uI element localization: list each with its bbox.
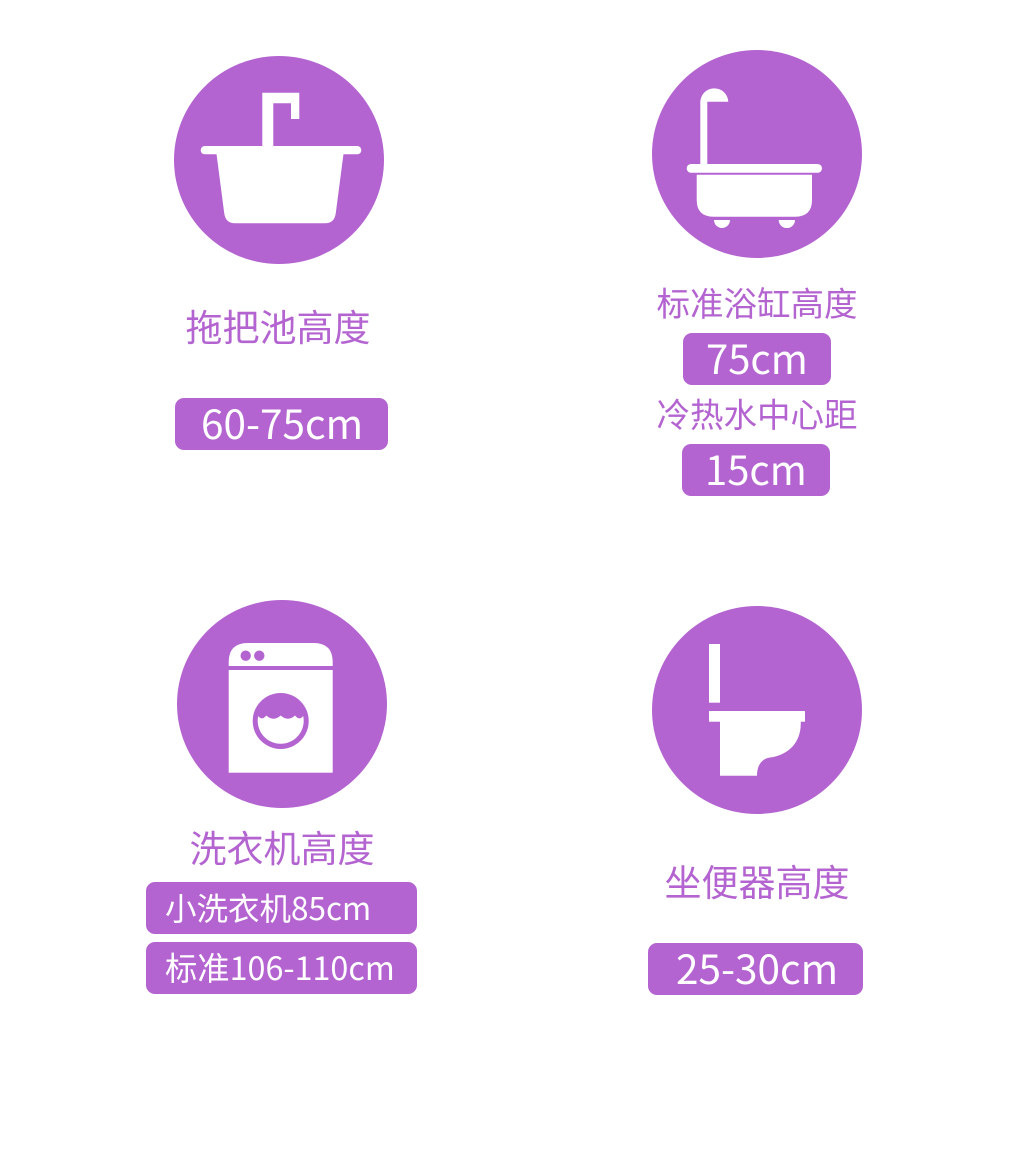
badge: 60-75cm: 60-75cm [201, 392, 363, 451]
badge: small washing machine 85cm [146, 882, 417, 934]
heading: mop sink height: 拖把池高度 [186, 298, 370, 352]
badge: small washing machine 85cm: 小洗衣机85cm [165, 884, 371, 930]
badge: 25-30cm [648, 943, 863, 995]
icon: mop sink [174, 56, 384, 264]
icon: washing machine [177, 600, 387, 808]
heading: toilet seat height: 坐便器高度 [664, 853, 850, 907]
icon: bathtub [652, 50, 862, 258]
badge: 60-75cm [175, 398, 388, 450]
badge: 75cm: 75cm [706, 328, 808, 386]
badge: standard 106-110cm: 标准106-110cm [165, 944, 395, 990]
badge: 15cm: 15cm [705, 439, 807, 497]
icon: toilet [652, 606, 862, 814]
heading: hot and cold water centre distance: 冷热水中心距 [656, 388, 858, 437]
badge: 75cm [683, 333, 831, 385]
heading: washing machine height: 洗衣机高度 [190, 819, 374, 873]
badge: 15cm [682, 444, 830, 496]
heading: standard bathtub height: 标准浴缸高度 [656, 277, 858, 326]
badge: 25-30cm: 25-30cm [676, 937, 838, 996]
